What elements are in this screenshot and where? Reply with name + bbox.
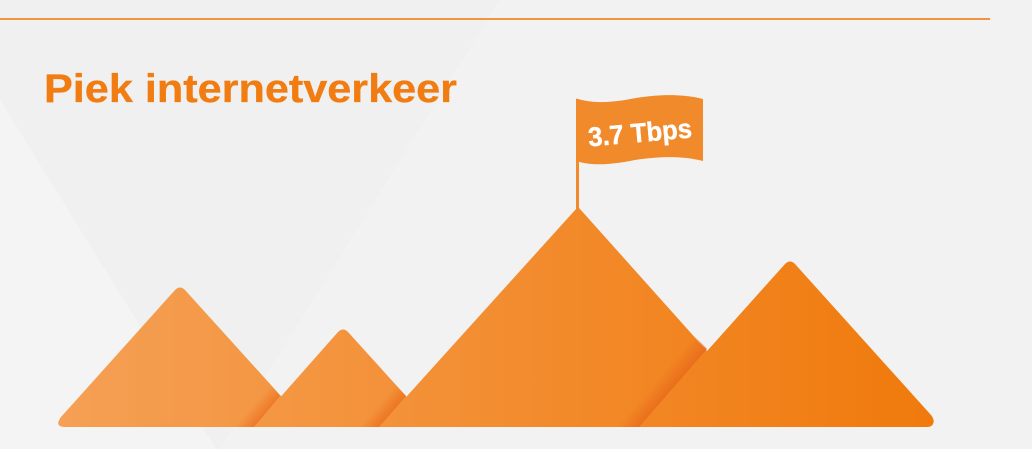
flag label: 3.7 Tbps	[587, 114, 693, 152]
flag pole	[576, 99, 579, 211]
mountain 4	[639, 262, 934, 427]
mountain 2	[254, 330, 434, 427]
flag	[576, 95, 703, 211]
flag cloth	[576, 95, 703, 164]
title: Piek internetverkeer	[44, 67, 457, 111]
mountain 3 (highest)	[379, 207, 775, 427]
top rule	[0, 18, 990, 20]
mountain 1	[58, 288, 309, 427]
mountains	[58, 207, 934, 427]
